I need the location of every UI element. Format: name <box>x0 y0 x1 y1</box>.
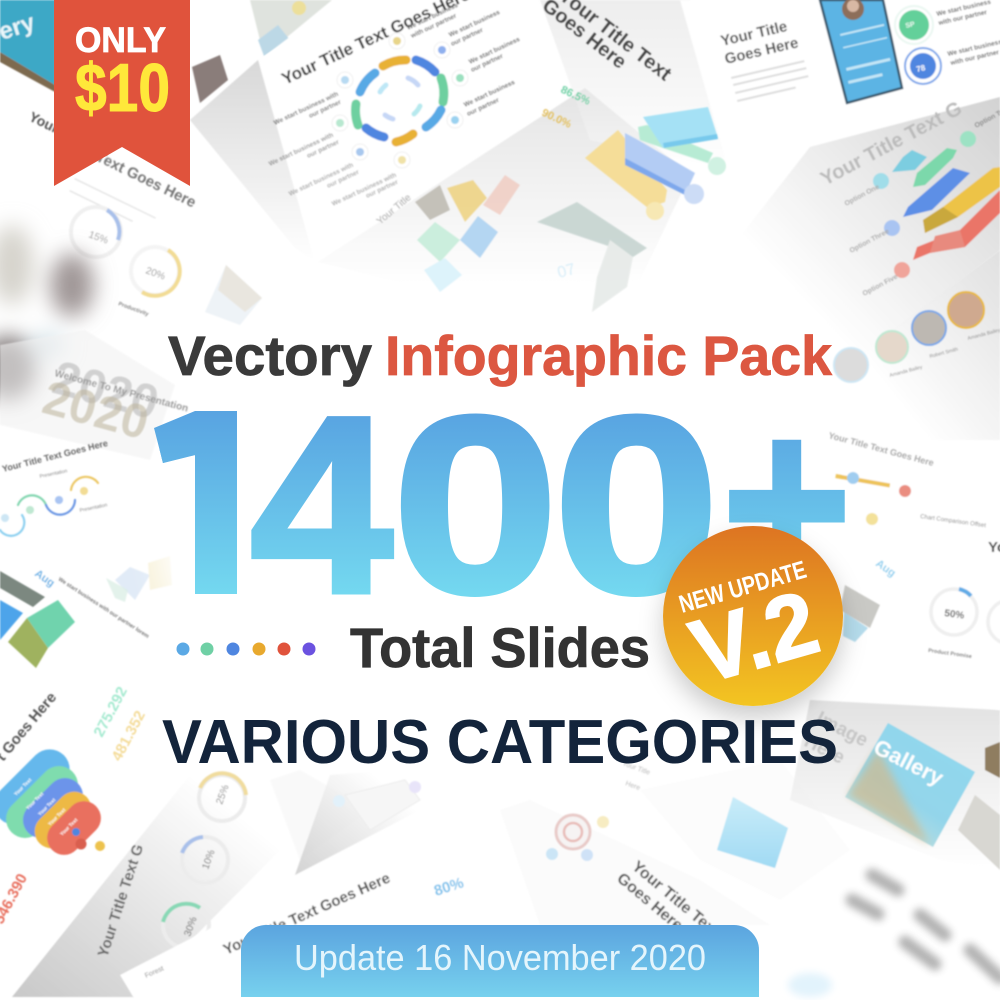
panel: diagonal white slide <box>120 770 560 1000</box>
panel: timeline slide: Presentation <box>79 502 108 514</box>
panel: title slide top (Your Title Text) <box>538 0 735 170</box>
panel: phone slide: Goes Here <box>723 34 800 68</box>
dots row <box>176 642 316 656</box>
icons: numbered circles <box>646 202 664 220</box>
price ribbon <box>54 0 190 186</box>
panel: avatars slide <box>830 250 1000 440</box>
text: left labels: We start business with <box>331 172 398 208</box>
panel: photo mosaic left <box>0 571 150 668</box>
panel: timeline slide: Your Title Text Goes Here <box>1 438 109 474</box>
chart: 3D pyramid <box>892 150 927 172</box>
subheading: total slides: Total Slides <box>350 616 650 679</box>
panel: diagonal white slide: Forest <box>144 965 165 980</box>
panel: right progress slide: Aug <box>873 558 898 580</box>
text: funnel values: 481.352 <box>109 708 149 764</box>
panel: circular diagram slide <box>262 0 585 262</box>
panel: puzzle slide: Aug <box>32 568 57 590</box>
panel: timeline slide <box>0 438 109 536</box>
panel: pyramid slide: Your Title Text G <box>817 97 966 190</box>
text: right labels: We start business <box>448 9 502 39</box>
phone mockup <box>820 0 902 103</box>
panel: mountain arrow photo <box>537 202 647 312</box>
panel: phone slide: Your Title <box>719 18 789 50</box>
chart: funnel arcs: Your Text <box>37 797 57 817</box>
panel: gallery slide: Here <box>801 731 848 769</box>
big number: 1 <box>144 369 284 650</box>
icons: numbered circles <box>960 131 976 147</box>
panel: left donut slide: Text Goes Here <box>93 148 199 211</box>
panel: left donut slide: Productivity <box>117 301 150 318</box>
panel: top-left gallery slide <box>0 0 55 92</box>
panel: left donut slide: 15% <box>87 229 110 247</box>
panel: target slide: Your Title Text <box>628 858 723 941</box>
panel: mosaic slide <box>318 88 690 292</box>
text: right labels: our partner <box>470 53 505 74</box>
text: left labels <box>268 91 400 208</box>
chart: funnel arcs: Your Text <box>47 807 67 827</box>
chart: isometric layered bars <box>585 107 726 220</box>
panel: gray rings slide: 30% <box>182 915 200 938</box>
chart: funnel arcs <box>0 684 149 927</box>
panel: mosaic slide: Your Title <box>375 192 414 227</box>
text: right labels: with our partner <box>409 12 458 40</box>
heading: various categories: VARIOUS CATEGORIES <box>162 708 838 777</box>
panel: blurred blue smudge bottom <box>788 973 832 997</box>
text: option labels: Option One <box>844 184 881 208</box>
panel: right progress slide: Product Promise <box>928 648 972 660</box>
panel: right progress slide <box>827 430 1000 710</box>
big number: 4 <box>250 364 393 645</box>
badge: new update: NEW UPDATE <box>676 556 810 619</box>
panel: small blue tile slide: Here <box>624 780 641 792</box>
text: option labels: Option Five <box>862 273 899 298</box>
panel: phone slide <box>680 0 1000 168</box>
panel: right progress slide: Chart Comparison Offset <box>920 514 986 529</box>
panel: blurred foreground smudge top-left <box>0 225 94 400</box>
icons around ring <box>332 33 468 168</box>
panel: 2020 welcome slide: Welcome To My Presentation <box>53 368 189 415</box>
update date pill: Update 16 November 2020 <box>294 937 706 978</box>
panel: avatars slide: Amanda Bailey <box>889 364 923 379</box>
panel: right progress slide: Your Title Text Goes Here <box>827 430 935 468</box>
panel: rock photo slide: Overview <box>214 93 244 114</box>
panel: left donut slide: 20% <box>144 265 167 283</box>
chart: funnel arcs: Your Text <box>25 791 45 811</box>
panel: gray wedge behind circular slide <box>190 60 315 262</box>
panel: left donut slide <box>27 108 262 325</box>
text: right labels: our partner <box>466 97 501 118</box>
heading: pack title accent: Infographic Pack <box>385 324 833 387</box>
panel: avatars slide: Robert Smith <box>929 347 959 360</box>
panel: small blue tile slide <box>621 760 850 900</box>
panel: diagonal white slide: 80% <box>432 874 466 900</box>
white centre veil <box>160 330 820 750</box>
chart: inner ring <box>380 78 420 119</box>
text: funnel values: 275.292 <box>91 684 131 740</box>
text: funnel values <box>0 684 149 927</box>
text: right labels <box>406 2 522 118</box>
panel: target slide: Goes Here <box>613 870 686 935</box>
panel: 2020 welcome slide: 2020 <box>47 351 164 430</box>
price ribbon: $10 <box>75 50 170 126</box>
panel: title slide top (Your Title Text): 86.5% <box>559 84 592 108</box>
panel: right progress slide: 50% <box>944 608 965 622</box>
heading: pack title: Vectory <box>168 324 372 387</box>
panel: title slide top (Your Title Text): 90.0% <box>540 107 573 131</box>
progress: blue circle <box>910 53 936 79</box>
text: left labels: We start business with <box>268 132 335 168</box>
text: left labels: our partner <box>326 169 361 190</box>
panel: top-centre image corner <box>250 0 332 56</box>
text: left labels: our partner <box>306 139 341 160</box>
text: left labels: our partner <box>365 179 400 200</box>
panel: gallery slide <box>790 700 1000 870</box>
progress: 50% ring <box>931 589 977 635</box>
panel: gray rings slide: 10% <box>200 848 218 871</box>
update date pill <box>241 925 759 997</box>
panel: puzzle slide <box>5 522 290 690</box>
panel: phone slide: 78 <box>915 63 927 74</box>
panel: gray rings slide: Your Title Text G <box>95 842 147 959</box>
text: option labels <box>844 106 1000 298</box>
chart: funnel arcs: Your Text <box>13 777 33 797</box>
badge: new update: V.2 <box>681 573 829 703</box>
panel: gray rings slide <box>12 765 370 997</box>
panel: blurred foreground bottom-right <box>852 875 1000 978</box>
text: left labels: We start business with <box>288 162 355 198</box>
text: right labels: We start business <box>406 2 460 32</box>
panel: gray rings slide: 25% <box>214 783 232 806</box>
panel: 2020 welcome slide <box>0 330 189 460</box>
panel: pyramid slide <box>710 97 1000 372</box>
big number: + <box>722 363 852 644</box>
panel: timeline slide: Presentation <box>39 468 68 480</box>
text: right labels: We start business <box>468 36 522 66</box>
big number: 0 <box>553 364 720 646</box>
panel: avatars slide: Amanda Bailey <box>967 327 1000 342</box>
text: phone slide labels: with our partner <box>949 49 1000 67</box>
panel: gallery slide: Gallery <box>870 734 948 791</box>
panel: phone slide: SP <box>905 21 916 30</box>
panel: gallery slide: Image <box>813 708 871 751</box>
badge: new update <box>663 526 843 706</box>
panel: target slide <box>500 800 770 941</box>
panel: left donut slide: Your <box>27 108 62 136</box>
panel: 2020 welcome slide: 2020 <box>37 371 154 450</box>
chart: segmented ring <box>355 60 444 142</box>
big number: 0 <box>392 364 559 646</box>
panel: rock photo slide <box>192 55 244 114</box>
panel: mountain arrow photo: 07 <box>556 261 577 282</box>
text: phone slide labels <box>936 0 1000 67</box>
text: left labels: We start business with <box>273 91 340 127</box>
text: left labels: our partner <box>308 99 343 120</box>
chart: funnel arcs: Your Text <box>59 817 79 837</box>
panel: diagonal white slide: Your Title Text Goes Here <box>221 870 393 959</box>
mini photos <box>840 585 880 628</box>
text: phone slide labels: with our partner <box>937 9 988 27</box>
panel: small blue tile slide: Your Title <box>621 760 651 777</box>
big number <box>154 411 845 597</box>
panel: photo mosaic left: We start business with our partner lorem <box>57 577 150 640</box>
price ribbon: ONLY <box>75 21 166 60</box>
text: right labels: We start business <box>463 79 517 109</box>
text: right labels: our partner <box>450 27 485 48</box>
progress: green circle <box>899 10 929 40</box>
text: option labels: Option Three <box>849 228 890 255</box>
